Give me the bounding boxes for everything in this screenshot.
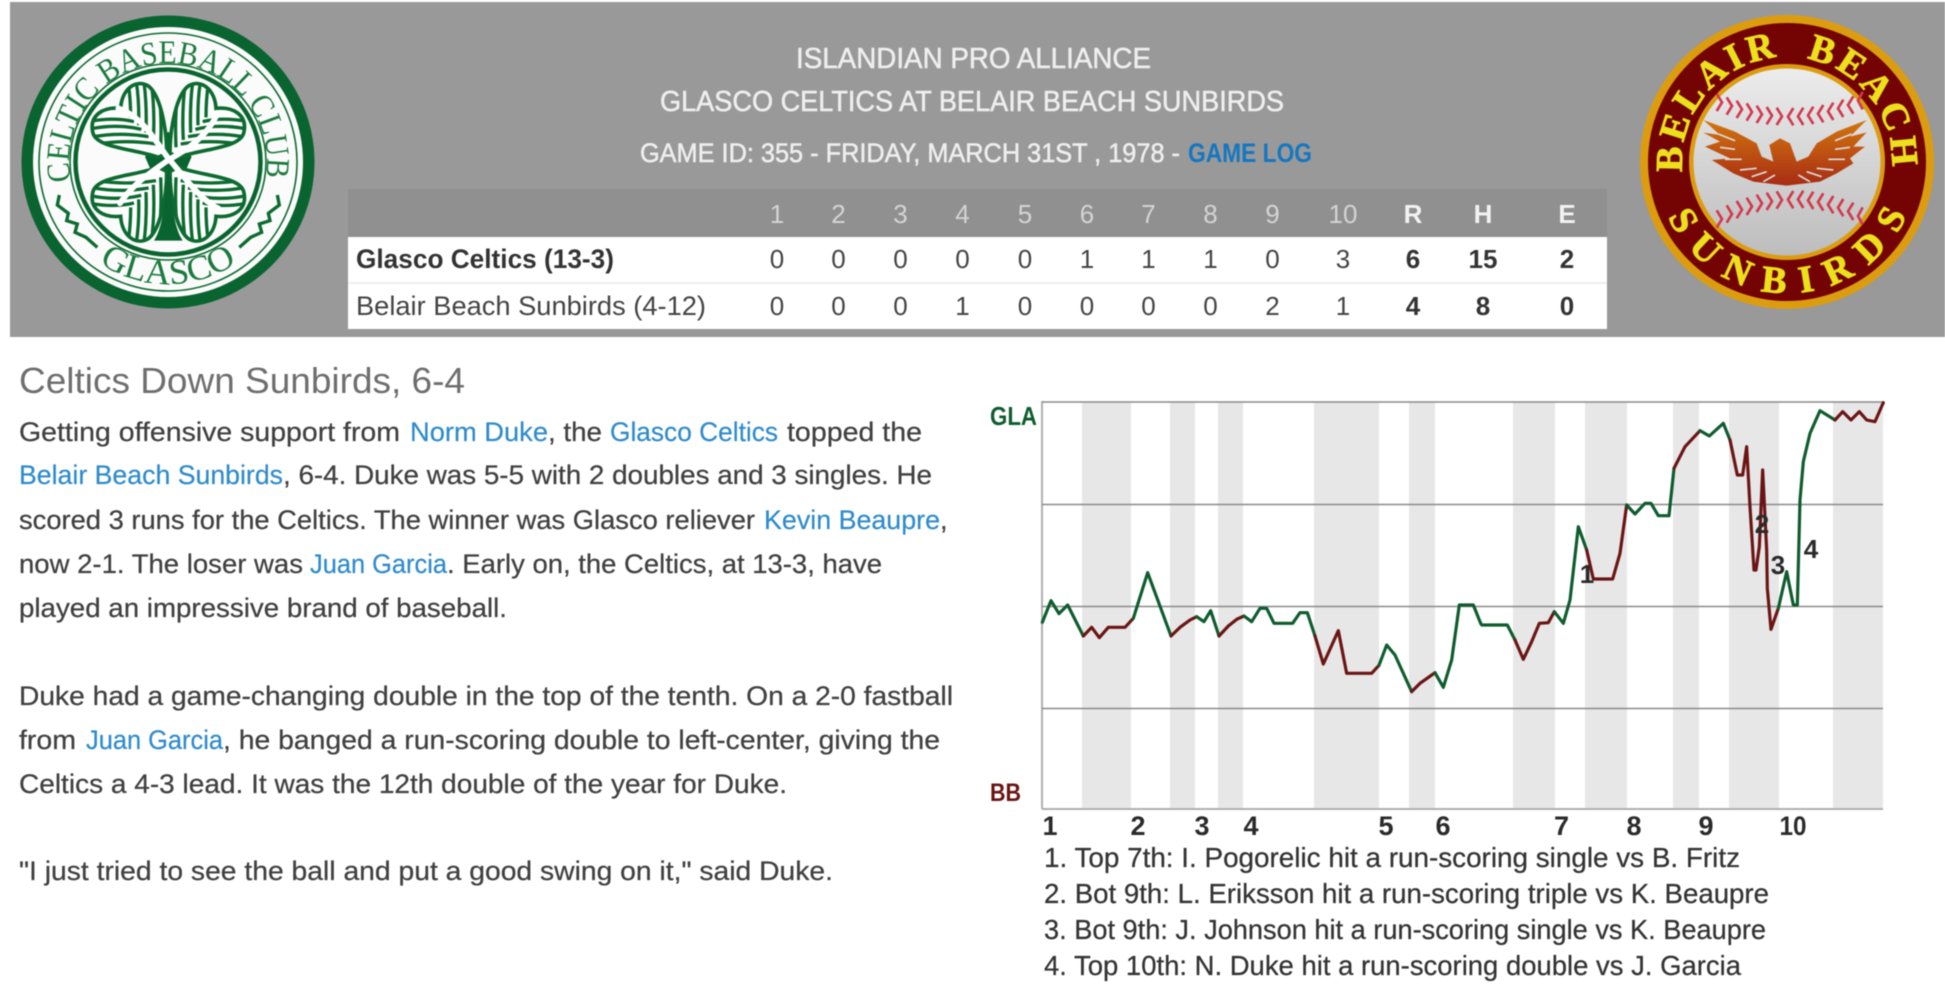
text block: game recap first paragraph: Belair Beach Sunbirds [19, 460, 283, 490]
table row: Glasco Celtics: 0 [893, 244, 908, 274]
chart x axis innings: 2 [1130, 811, 1146, 841]
chart line: second half [1481, 403, 1883, 659]
text block: game recap first paragraph: Getting offensive support from [19, 417, 400, 447]
table row: Belair Beach Sunbirds: 8 [1476, 291, 1490, 321]
text block: game recap first paragraph: . Early on, the Celtics, at 13-3, have [447, 549, 882, 579]
table row: Glasco Celtics: 6 [1406, 244, 1420, 274]
subtitle: game id and date with game log link: GAME ID: 355 - FRIDAY, MARCH 31ST , 1978 - [640, 138, 1180, 168]
table row: Belair Beach Sunbirds: 0 [770, 291, 784, 321]
table row: Glasco Celtics: 1 [1203, 244, 1218, 274]
table row: Glasco Celtics: 3 [1336, 244, 1350, 274]
crest text: club name: CELTIC BASEBALL CLUB [46, 40, 290, 182]
chart callout numbers: 2 [1755, 509, 1769, 539]
legend: key scoring plays: 1. Top 7th: I. Pogorelic hit a run-scoring single vs B. Fritz [1044, 842, 1740, 873]
legend: key scoring plays: 3. Bot 9th: J. Johnson hit a run-scoring single vs K. Beaupre [1044, 914, 1766, 945]
crest text: city: GLASCO [102, 246, 234, 286]
table row: Belair Beach Sunbirds: 4 [1406, 291, 1421, 321]
chart line: first half [1042, 573, 1481, 692]
text block: game recap first paragraph: scored 3 runs for the Celtics. The winner was Glasco reliever [19, 505, 755, 535]
text block: game recap second paragraph: Juan Garcia [86, 725, 224, 755]
table row: Glasco Celtics: 15 [1469, 244, 1497, 274]
table header: innings and totals: 5 [1018, 199, 1032, 229]
chart callout numbers: 3 [1771, 550, 1785, 580]
table header: innings and totals: 10 [1329, 199, 1357, 229]
text block: game recap first paragraph: , 6-4. Duke was 5-5 with 2 doubles and 3 singles. He [283, 460, 932, 490]
table header: innings and totals: 7 [1141, 199, 1156, 229]
table row: Belair Beach Sunbirds: 0 [1203, 291, 1218, 321]
title: matchup: GLASCO CELTICS AT BELAIR BEACH SUNBIRDS [660, 86, 1284, 118]
chart callout numbers [1580, 509, 1819, 589]
table header: innings and totals: 2 [831, 199, 846, 229]
text block: game recap first paragraph: now 2-1. The loser was [19, 549, 303, 579]
chart x axis innings: 7 [1554, 811, 1569, 841]
table row: Glasco Celtics [356, 244, 1574, 274]
subtitle: game id and date with game log link: GAME LOG [1188, 138, 1312, 168]
table row: Belair Beach Sunbirds: 0 [1080, 291, 1094, 321]
text block: game recap first paragraph: , the [548, 417, 602, 447]
text block: game recap second paragraph: from [19, 725, 76, 755]
table row: Glasco Celtics: 0 [1265, 244, 1280, 274]
logo: Glasco Celtics crest [20, 14, 316, 310]
table row: Glasco Celtics: 1 [1080, 244, 1094, 274]
table header: innings and totals: H [1474, 199, 1492, 229]
table row: Belair Beach Sunbirds: 0 [1141, 291, 1156, 321]
chart x axis innings: 8 [1626, 811, 1642, 841]
table row: Belair Beach Sunbirds: 0 [893, 291, 908, 321]
text block: game recap first paragraph [19, 417, 948, 623]
crest text: team name: SUNBIRDS [1668, 206, 1906, 294]
legend: key scoring plays [1044, 842, 1769, 981]
table row: Glasco Celtics: 1 [1141, 244, 1156, 274]
table header: innings and totals: 9 [1265, 199, 1280, 229]
table row: Glasco Celtics: 0 [955, 244, 970, 274]
table row: Glasco Celtics: 0 [831, 244, 846, 274]
legend: key scoring plays: 4. Top 10th: N. Duke hit a run-scoring double vs J. Garcia [1044, 950, 1741, 981]
text block: player quote: "I just tried to see the ball and put a good swing on it," said Duke. [19, 856, 833, 886]
table header: innings and totals: 1 [770, 199, 784, 229]
table row: Belair Beach Sunbirds: 0 [831, 291, 846, 321]
chart label: Glasco: GLA [990, 401, 1037, 431]
table row: Glasco Celtics: 0 [1018, 244, 1032, 274]
table row: Glasco Celtics: Glasco Celtics (13-3) [356, 244, 614, 274]
chart x axis innings: 1 [1042, 811, 1058, 841]
text block: game recap second paragraph: Duke had a game-changing double in the top of the tenth. On a 2-0 fastball [19, 681, 953, 711]
chart x axis innings [1042, 811, 1806, 841]
panel: header band [10, 2, 1945, 337]
text block: game recap first paragraph: played an impressive brand of baseball. [19, 593, 507, 623]
text block: game recap first paragraph: topped the [787, 417, 922, 447]
table row: Belair Beach Sunbirds: 1 [1336, 291, 1350, 321]
chart callout numbers: 4 [1804, 534, 1819, 564]
table row: Glasco Celtics: 2 [1560, 244, 1574, 274]
table header: innings and totals: 8 [1203, 199, 1218, 229]
chart bands: half-inning shading [1082, 402, 1883, 809]
crest shamrock [57, 80, 279, 247]
table row: Glasco Celtics: 0 [770, 244, 784, 274]
text block: game recap second paragraph: , he banged a run-scoring double to left-center, giving the [223, 725, 940, 755]
text block: game recap first paragraph: Kevin Beaupre [764, 505, 940, 535]
crest text: city name: BELAIR BEACH [1656, 33, 1919, 173]
title: league name: ISLANDIAN PRO ALLIANCE [796, 43, 1151, 75]
chart x axis innings: 6 [1435, 811, 1451, 841]
table header: innings and totals: E [1558, 199, 1576, 229]
chart x axis innings: 10 [1780, 811, 1806, 841]
heading: article headline: Celtics Down Sunbirds, 6-4 [19, 360, 465, 401]
table row: Belair Beach Sunbirds: 0 [1018, 291, 1032, 321]
logo: Belair Beach Sunbirds crest [1639, 14, 1935, 310]
text block: game recap first paragraph: , [940, 505, 948, 535]
table header: innings and totals [770, 199, 1576, 229]
crest baseball seams and eagle [1703, 92, 1867, 228]
chart x axis innings: 5 [1378, 811, 1394, 841]
chart: win probability graph [990, 401, 1883, 841]
text block: game recap second paragraph: Celtics a 4-3 lead. It was the 12th double of the year for Duke. [19, 769, 787, 799]
legend: key scoring plays: 2. Bot 9th: L. Eriksson hit a run-scoring triple vs K. Beaupre [1044, 878, 1769, 909]
table row: Belair Beach Sunbirds: 1 [955, 291, 970, 321]
table row: Belair Beach Sunbirds: 2 [1265, 291, 1280, 321]
text block: game recap first paragraph: Glasco Celtics [610, 417, 778, 447]
text block: game recap first paragraph: Norm Duke [410, 417, 548, 447]
table row: Belair Beach Sunbirds [356, 291, 1574, 321]
text block: game recap second paragraph [19, 681, 953, 799]
table header: innings and totals: 4 [955, 199, 970, 229]
chart x axis innings: 3 [1194, 811, 1210, 841]
table row: Belair Beach Sunbirds: Belair Beach Sunbirds (4-12) [356, 291, 706, 321]
table header: innings and totals: 3 [893, 199, 908, 229]
chart label: Belair Beach: BB [990, 779, 1021, 807]
chart x axis innings: 9 [1698, 811, 1714, 841]
table row: Belair Beach Sunbirds: 0 [1560, 291, 1574, 321]
text block: game recap first paragraph: Juan Garcia [310, 549, 448, 579]
chart x axis innings: 4 [1243, 811, 1259, 841]
table header: innings and totals: R [1404, 199, 1423, 229]
panel: line score table [348, 189, 1607, 329]
chart callout numbers: 1 [1580, 559, 1594, 589]
table header: innings and totals: 6 [1080, 199, 1094, 229]
